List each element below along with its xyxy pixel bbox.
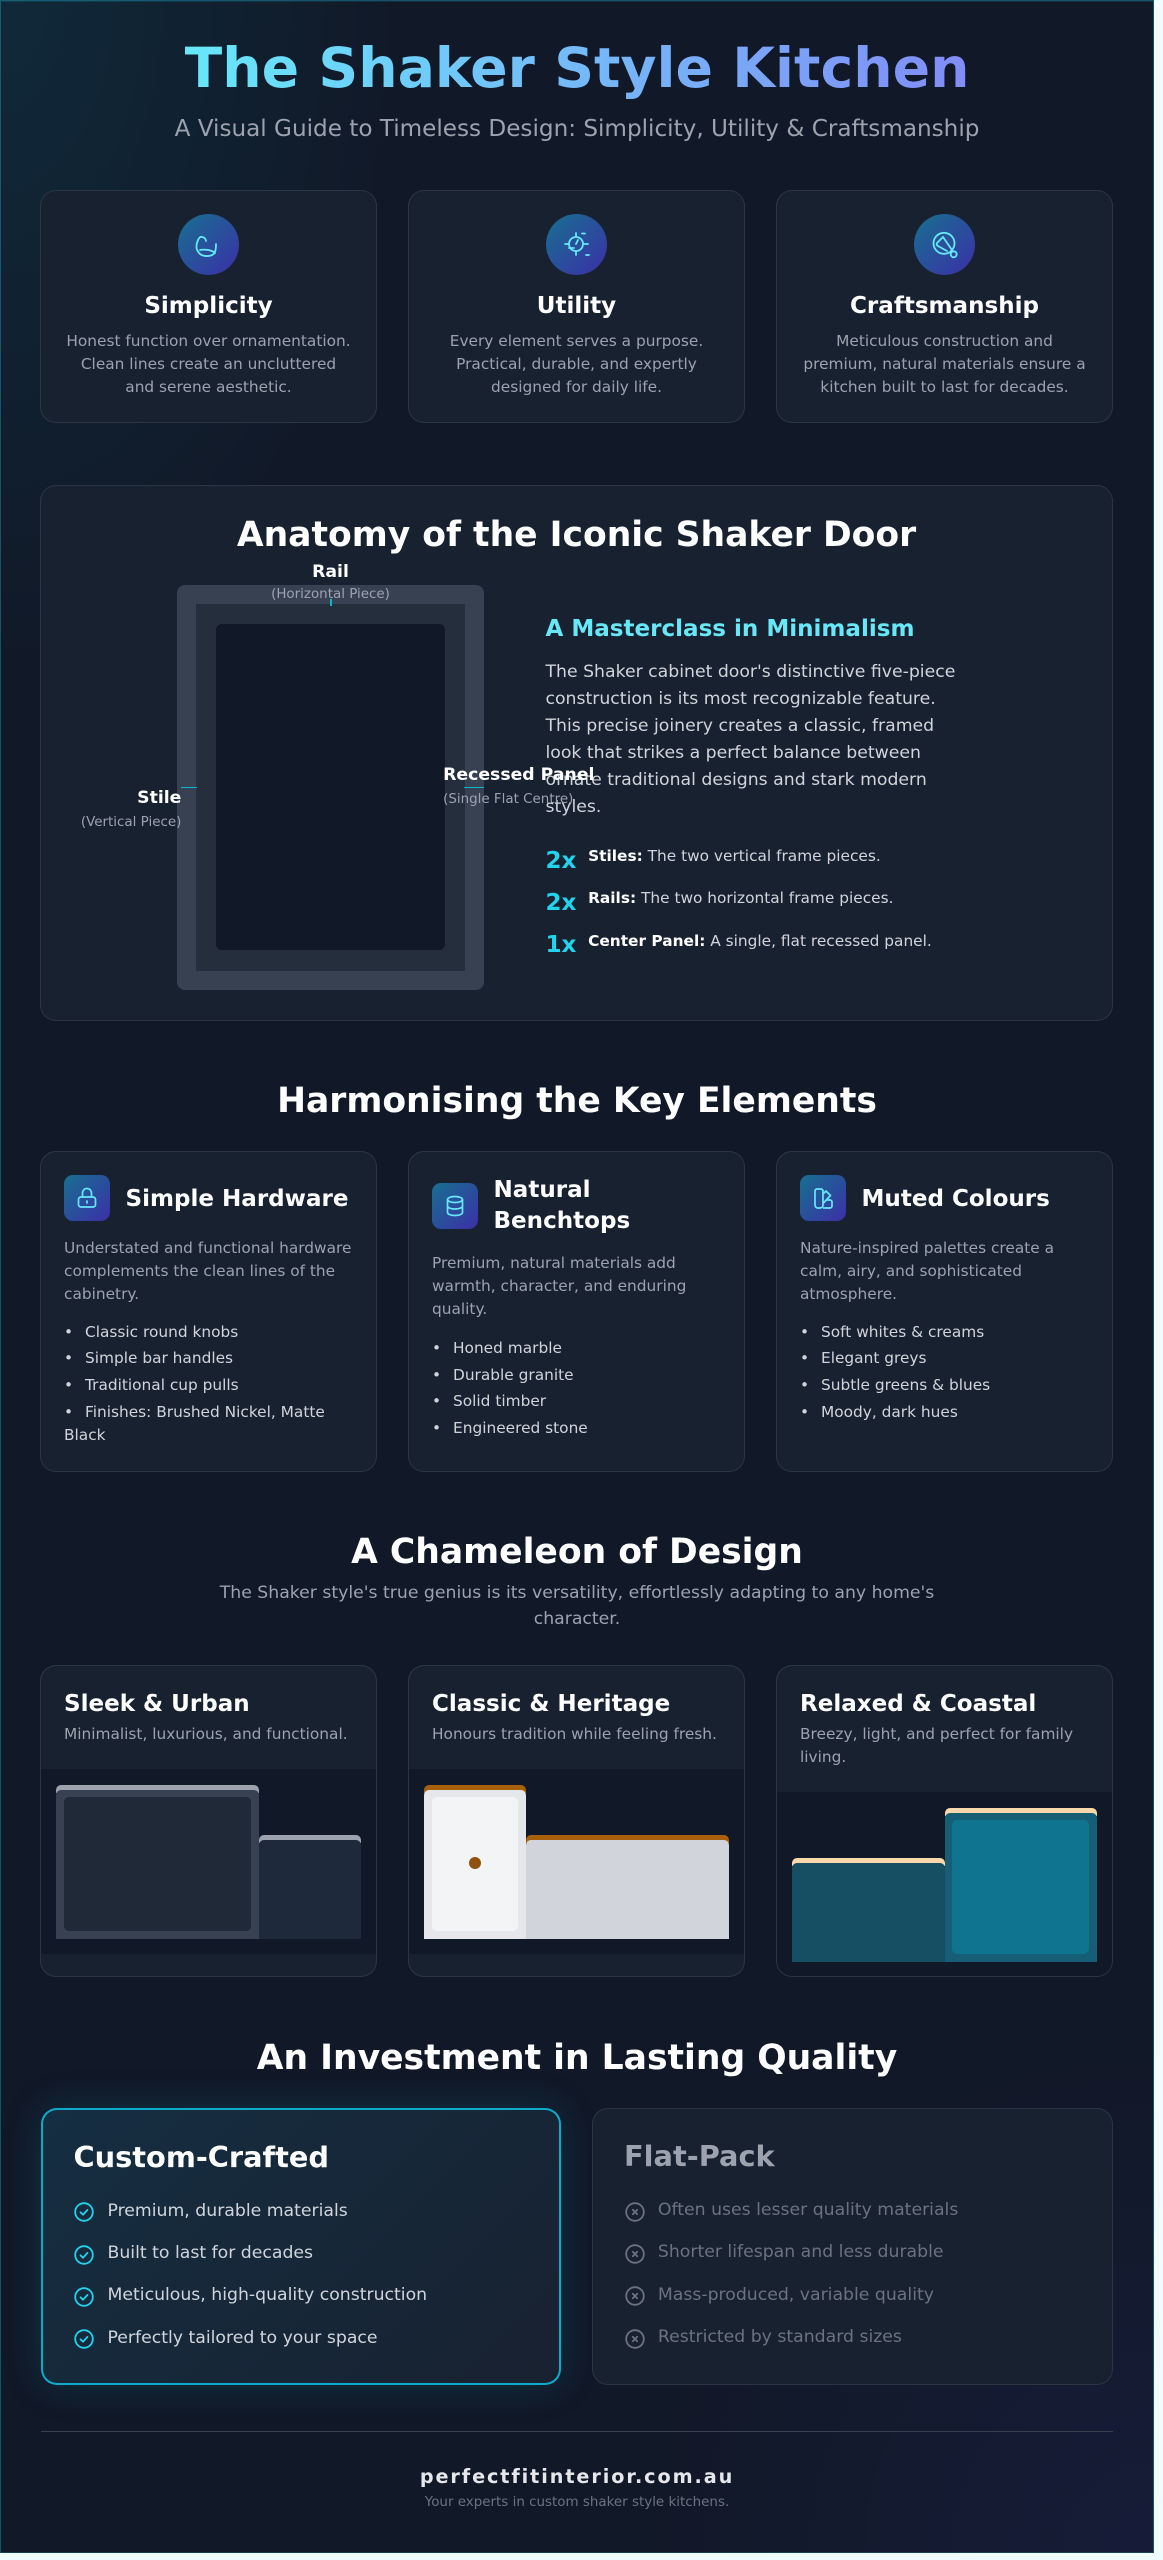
list: benchtops: Honed marble <box>453 1339 562 1357</box>
stat: panel text: Center Panel: A single, flat recessed panel. <box>588 932 932 950</box>
text: colours: atmosphere. <box>800 1285 897 1303</box>
heading: coastal: Relaxed & Coastal <box>800 1690 1036 1716</box>
text: utility: designed for daily life. <box>491 378 662 396</box>
text: coastal <box>800 1725 1073 1766</box>
item: built to last: Built to last for decades <box>107 2243 313 2263</box>
heading: natural benchtops <box>494 1177 630 1234</box>
text: simplicity: and serene aesthetic. <box>125 378 292 396</box>
arrow: recessed panel tick <box>464 786 484 788</box>
panel: simple hardware <box>40 1151 377 1472</box>
panel: simplicity <box>40 190 377 423</box>
list: colours: Moody, dark hues <box>821 1403 958 1421</box>
panel: natural benchtops <box>408 1151 745 1472</box>
text: craftsmanship: premium, natural materials ensure a <box>803 355 1086 373</box>
panel: utility <box>408 190 745 423</box>
heading: chameleon: A Chameleon of Design <box>351 1532 803 1572</box>
heading: investment: An Investment in Lasting Quality <box>257 2038 897 2078</box>
diagram: shaker door <box>177 585 484 990</box>
heading: key elements: Harmonising the Key Elements <box>277 1080 877 1120</box>
title: The Shaker Style Kitchen <box>185 37 969 101</box>
list: colours: Elegant greys <box>821 1349 926 1367</box>
icon: simplicity <box>178 214 239 275</box>
text: colours <box>800 1239 1054 1303</box>
stat: stiles text: Stiles: The two vertical frame pieces. <box>588 847 881 865</box>
heading: sleek: Sleek & Urban <box>64 1690 250 1716</box>
label: stile note: (Vertical Piece) <box>81 815 181 830</box>
stat: panel count: 1x <box>546 932 576 958</box>
panel: muted colours <box>776 1151 1113 1472</box>
text: simplicity: Clean lines create an uncluttered <box>81 355 336 373</box>
label: stile: Stile <box>137 788 181 808</box>
list: colours: Soft whites & creams <box>821 1322 984 1340</box>
text: door description <box>545 662 955 817</box>
stat: rails text: Rails: The two horizontal frame pieces. <box>588 889 893 907</box>
text: utility: Practical, durable, and expertly <box>456 355 697 373</box>
panel: classic and heritage <box>408 1665 745 1977</box>
label: recessed panel note: (Single Flat Centre) <box>443 792 573 807</box>
text: benchtops <box>432 1254 686 1318</box>
icon: database <box>432 1183 478 1229</box>
text: craftsmanship: Meticulous construction and <box>836 332 1053 350</box>
list: benchtops: Durable granite <box>453 1366 574 1384</box>
stat: stiles count: 2x <box>546 848 576 874</box>
text: colours: Nature-inspired palettes create a <box>800 1239 1054 1257</box>
text: hardware: cabinetry. <box>64 1285 139 1303</box>
label: rail: Rail <box>312 562 349 582</box>
tall cabinet with knob <box>424 1785 526 1939</box>
text: chameleon intro <box>220 1583 934 1629</box>
text: benchtops: Premium, natural materials add <box>432 1254 676 1272</box>
icon: lock <box>64 1175 110 1221</box>
arrow: rail tick <box>330 598 332 606</box>
text: utility <box>450 332 703 396</box>
door frame recess <box>196 604 465 971</box>
text: utility: Every element serves a purpose. <box>450 332 703 350</box>
heading: custom-crafted: Custom-Crafted <box>74 2140 329 2174</box>
list: hardware: Simple bar handles <box>85 1349 233 1367</box>
list: hardware <box>64 1322 325 1444</box>
list: hardware: Classic round knobs <box>85 1322 238 1340</box>
panel: craftsmanship <box>776 190 1113 423</box>
text: door description: The Shaker cabinet door's distinctive five-piece <box>546 662 955 682</box>
panel: flat-pack <box>592 2108 1113 2384</box>
heading: natural benchtops: Natural <box>494 1177 591 1203</box>
subtitle: A Visual Guide to Timeless Design: Simplicity, Utility & Craftsmanship <box>175 116 979 142</box>
list: colours: • <box>800 1349 809 1367</box>
text: coastal: living. <box>800 1748 846 1766</box>
text: craftsmanship <box>803 332 1086 396</box>
footer tagline: Your experts in custom shaker style kitchens. <box>425 2495 729 2510</box>
panel: custom-crafted <box>40 2108 561 2384</box>
heading: craftsmanship: Craftsmanship <box>850 293 1039 319</box>
list: benchtops: • <box>432 1392 441 1410</box>
text: craftsmanship: kitchen built to last for decades. <box>820 378 1069 396</box>
list: benchtops: Solid timber <box>453 1392 546 1410</box>
list: benchtops: Engineered stone <box>453 1419 588 1437</box>
list: benchtops: • <box>432 1339 441 1357</box>
text: simplicity: Honest function over ornamentation. <box>66 332 351 350</box>
list: hardware: • <box>64 1322 73 1340</box>
heading: anatomy: Anatomy of the Iconic Shaker Door <box>237 515 916 555</box>
panel: relaxed and coastal <box>776 1665 1113 1977</box>
text: door description: styles. <box>546 797 601 817</box>
item: construction: Meticulous, high-quality construction <box>107 2285 427 2305</box>
tall cabinet <box>56 1785 259 1939</box>
arrow: stile tick <box>181 786 197 788</box>
item: premium materials: Premium, durable materials <box>107 2201 348 2221</box>
heading: simple hardware: Simple Hardware <box>126 1186 348 1212</box>
scene: heritage kitchen <box>408 1769 745 1954</box>
scene: urban kitchen <box>40 1769 377 1954</box>
list: hardware: • <box>64 1376 73 1394</box>
stat: rails count: 2x <box>546 890 576 916</box>
panel: anatomy of the door <box>40 485 1113 1021</box>
text: sleek: Minimalist, luxurious, and functional. <box>64 1725 348 1743</box>
text: door description: This precise joinery creates a classic, framed <box>546 716 934 736</box>
text: benchtops: warmth, character, and enduring <box>432 1277 686 1295</box>
low cabinet <box>259 1835 361 1939</box>
list: hardware: Finishes: Brushed Nickel, Matte Black <box>64 1403 325 1444</box>
subheading: masterclass: A Masterclass in Minimalism <box>546 616 914 642</box>
text: chameleon intro: character. <box>534 1609 620 1629</box>
text: hardware <box>64 1239 351 1303</box>
footer url: perfectfitinterior.com.au <box>420 2465 734 2488</box>
item: lesser materials: Often uses lesser quality materials <box>658 2200 958 2220</box>
heading: classic: Classic & Heritage <box>432 1690 670 1716</box>
heading: utility: Utility <box>537 293 616 319</box>
list: colours: • <box>800 1403 809 1421</box>
list: benchtops: • <box>432 1366 441 1384</box>
heading: muted colours: Muted Colours <box>862 1186 1050 1212</box>
panel: sleek and urban <box>40 1665 377 1977</box>
text: chameleon intro: The Shaker style's true genius is its versatility, effortlessly adapting to any home's <box>220 1583 934 1603</box>
text: classic: Honours tradition while feeling fresh. <box>432 1725 717 1743</box>
icon: craftsmanship <box>914 214 975 275</box>
text: door description: look that strikes a perfect balance between <box>546 743 921 763</box>
low cabinet <box>792 1858 945 1962</box>
list: hardware: • <box>64 1403 73 1421</box>
text: benchtops: quality. <box>432 1300 487 1318</box>
label: rail note: (Horizontal Piece) <box>271 587 390 602</box>
text: colours: calm, airy, and sophisticated <box>800 1262 1022 1280</box>
low cabinet <box>526 1835 729 1939</box>
list: colours <box>800 1322 990 1421</box>
icon: swatch <box>800 1175 846 1221</box>
list: colours: • <box>800 1376 809 1394</box>
text: hardware: complements the clean lines of the <box>64 1262 335 1280</box>
text: door description: ornate traditional designs and stark modern <box>546 770 927 790</box>
item: tailored: Perfectly tailored to your space <box>107 2328 378 2348</box>
heading: flat-pack: Flat-Pack <box>624 2139 775 2173</box>
list: benchtops: • <box>432 1419 441 1437</box>
item: mass-produced: Mass-produced, variable quality <box>658 2285 934 2305</box>
tall cabinet <box>945 1808 1097 1962</box>
list: colours: Subtle greens & blues <box>821 1376 990 1394</box>
icon: utility <box>546 214 607 275</box>
list: benchtops <box>432 1339 588 1437</box>
list: colours: • <box>800 1322 809 1340</box>
recessed centre panel <box>216 624 445 950</box>
item: shorter lifespan: Shorter lifespan and less durable <box>658 2242 944 2262</box>
list: hardware: Traditional cup pulls <box>85 1376 239 1394</box>
heading: simplicity: Simplicity <box>144 293 273 319</box>
heading: natural benchtops: Benchtops <box>494 1208 630 1234</box>
text: door description: construction is its most recognizable feature. <box>546 689 936 709</box>
label: recessed panel: Recessed Panel <box>443 765 594 785</box>
text: simplicity <box>66 332 351 396</box>
text: hardware: Understated and functional hardware <box>64 1239 351 1257</box>
text: coastal: Breezy, light, and perfect for family <box>800 1725 1073 1743</box>
item: standard sizes: Restricted by standard sizes <box>658 2327 902 2347</box>
list: hardware: • <box>64 1349 73 1367</box>
scene: coastal kitchen <box>776 1792 1113 1977</box>
